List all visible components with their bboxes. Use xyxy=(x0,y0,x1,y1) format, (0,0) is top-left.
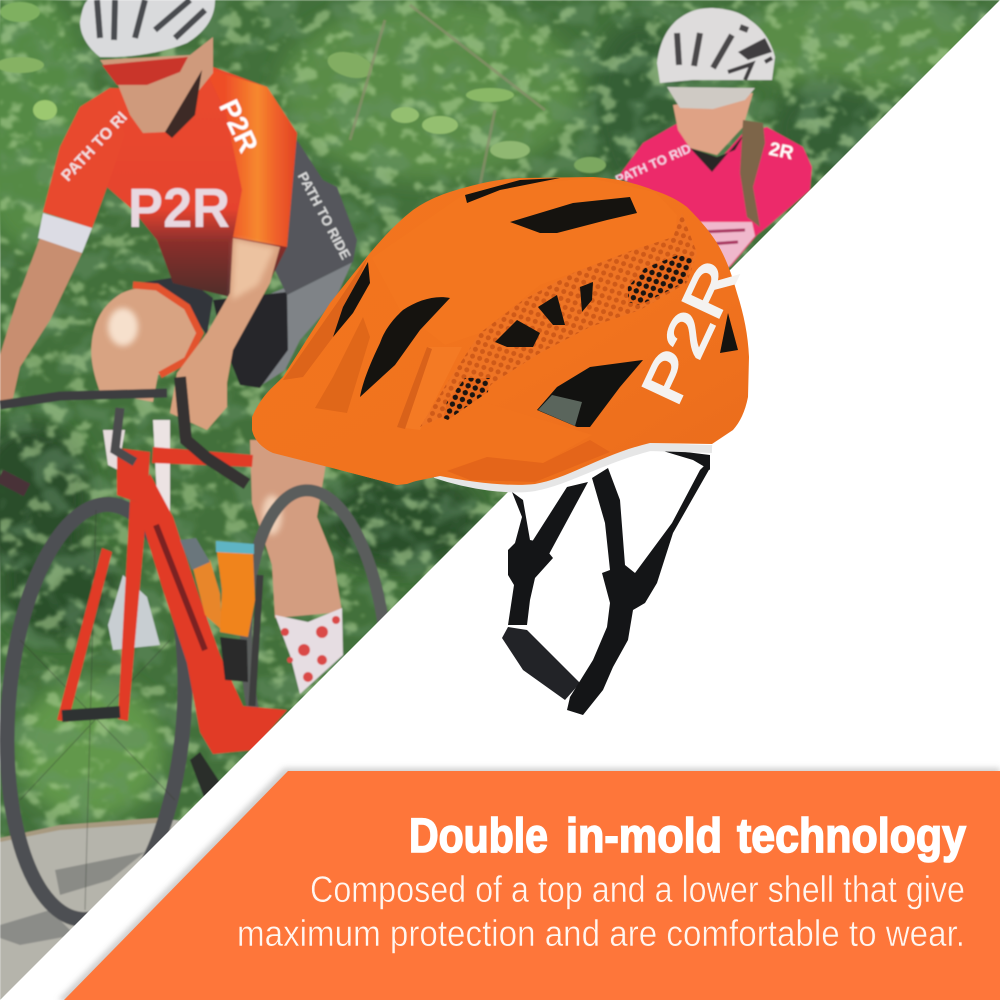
mesh holes xyxy=(495,320,540,347)
sleeve cuff xyxy=(38,213,92,253)
water bottles xyxy=(193,560,222,630)
face xyxy=(673,93,753,155)
front wheel xyxy=(0,498,198,926)
rear vent xyxy=(720,313,738,353)
top vent rear xyxy=(465,178,560,203)
glasses xyxy=(667,87,755,109)
drivetrain xyxy=(62,712,120,716)
hex mesh dark front xyxy=(443,378,490,420)
visor lower lip xyxy=(300,403,592,485)
frame xyxy=(57,447,287,754)
helmet: white xyxy=(657,8,775,83)
front cyclist: P2R xyxy=(213,95,264,157)
road xyxy=(0,816,180,1000)
rear cyclist: PATH TO RID xyxy=(613,141,693,187)
vents xyxy=(333,178,738,397)
rear wheel xyxy=(235,486,399,834)
jersey main xyxy=(43,67,297,300)
helmet xyxy=(252,177,752,488)
front cyclist: PATH TO RIDE xyxy=(295,169,354,262)
near leg xyxy=(250,440,342,618)
jersey side panel xyxy=(270,140,357,295)
banner shadow xyxy=(58,768,1000,1000)
top vent main xyxy=(510,197,637,233)
bicycle xyxy=(0,377,399,926)
far leg sock xyxy=(153,420,170,520)
jersey logo text: P2R xyxy=(128,176,230,239)
sunglasses xyxy=(102,57,188,85)
right sleeve xyxy=(205,68,297,247)
front cyclist: PATH TO RI xyxy=(58,109,131,185)
jersey lower stripes xyxy=(698,222,755,268)
far arm xyxy=(0,238,82,402)
shorts hem xyxy=(133,285,200,375)
heading xyxy=(409,810,966,863)
front cyclist xyxy=(0,0,357,694)
handlebar xyxy=(0,393,167,405)
helmet: white xyxy=(80,0,215,57)
P2R logo: P2R xyxy=(629,251,752,414)
orange shell xyxy=(252,177,749,485)
shorts dark xyxy=(213,292,288,388)
collar xyxy=(690,133,745,172)
middle vent xyxy=(360,297,450,397)
branches xyxy=(350,5,545,185)
white lower shell trim xyxy=(435,447,712,488)
braid xyxy=(740,120,765,227)
near arm xyxy=(170,238,280,430)
near thigh xyxy=(91,287,200,402)
body text xyxy=(237,869,965,954)
heading: technology xyxy=(737,810,966,863)
side vent xyxy=(537,360,643,427)
heading: in-mold xyxy=(566,810,722,863)
heading: Double xyxy=(409,810,548,863)
rear cyclist xyxy=(613,8,812,268)
sock xyxy=(275,608,343,694)
panel: orange caption banner xyxy=(64,771,1000,1000)
hex mesh dark rear xyxy=(628,255,693,305)
front recesses xyxy=(283,257,368,380)
left sleeve xyxy=(43,88,125,228)
leaves xyxy=(0,2,606,173)
jersey: pink xyxy=(618,123,812,267)
helmet strap xyxy=(502,448,710,715)
jersey logo text: 2R xyxy=(767,139,795,164)
hex mesh band xyxy=(420,213,697,427)
shorts light xyxy=(255,260,353,385)
far shoe xyxy=(108,575,160,650)
crown highlight xyxy=(372,178,677,345)
neck and face xyxy=(100,37,213,133)
left vent xyxy=(333,262,370,337)
